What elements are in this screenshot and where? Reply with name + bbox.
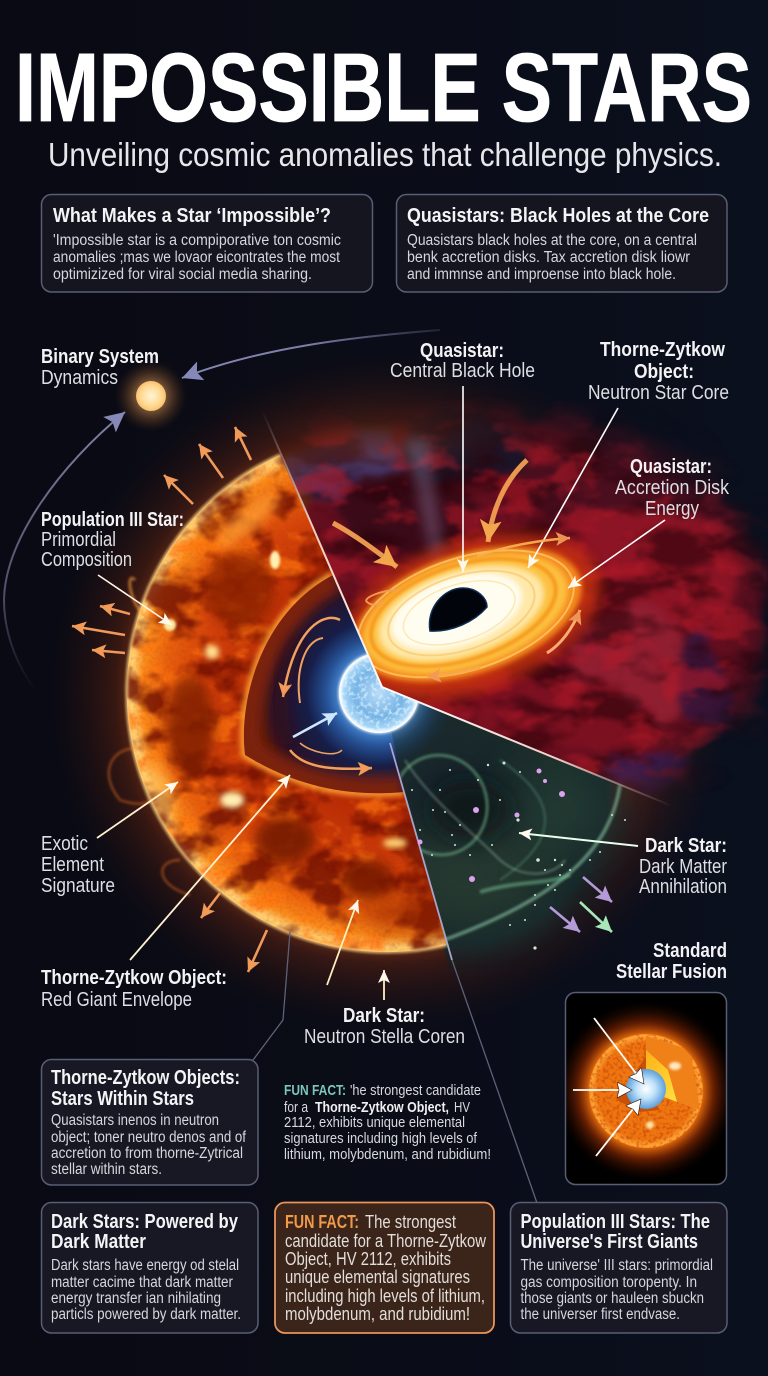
arrow: binary orbit top (182, 330, 440, 378)
panel: quasistars: Quasistars: Black Holes at the Core (407, 204, 709, 227)
dark star sector (392, 703, 639, 972)
panel: dark stars: particls powered by dark matter. (51, 1306, 241, 1323)
cavity inside the star (244, 576, 403, 794)
arrow: binary orbit left (4, 412, 125, 690)
arrows: fusion pressure (573, 1018, 644, 1156)
callout: fun fact teal: 2112, exhibits unique elemental (284, 1114, 465, 1131)
panel: population III stars: Population III Stars: The (520, 1210, 710, 1233)
icon: black hole (429, 588, 487, 631)
panel: quasistars (396, 194, 727, 292)
arrow: dark matter annihilation (519, 833, 638, 846)
arrow: red giant envelope (130, 775, 290, 960)
label: dark star annihilation: Dark Star: (645, 835, 727, 857)
giant star cutaway (109, 440, 455, 960)
panel: thorne-zytkow objects (42, 1060, 258, 1185)
panel: thorne-zytkow objects: Stars Within Stars (51, 1087, 194, 1110)
arrows: ejecta from giant star (72, 427, 267, 972)
label: thorne-zytkow neutron star core: Object: (634, 361, 694, 383)
label: thorne-zytkow red giant envelope: Red Giant Envelope (41, 989, 192, 1011)
label: thorne-zytkow red giant envelope (41, 967, 227, 1011)
callout: fun fact teal (284, 1082, 491, 1163)
label: population III star: Population III Star: (41, 509, 184, 531)
panel: what makes a star impossible: What Makes a Star ‘Impossible’? (53, 204, 331, 227)
dark star particles (411, 762, 626, 950)
connector line to population panel (452, 960, 537, 1203)
label: quasistar central black hole (390, 340, 535, 382)
arrow: accretion disk energy (568, 520, 665, 588)
label: binary system (41, 346, 159, 389)
panel: fun fact orange: including high levels of lithium, (285, 1285, 485, 1306)
panel: fun fact orange: The strongest (365, 1211, 456, 1232)
label: quasistar accretion disk energy: Energy (645, 498, 699, 520)
callout: fun fact teal: 'he strongest candidate (350, 1082, 481, 1099)
arrows: quasar infall (333, 460, 580, 677)
arrow: neutron star core (528, 408, 618, 568)
label: standard stellar fusion: Standard (653, 940, 727, 962)
panel: what makes a star impossible: 'Impossible star is a compiporative ton cosmic (53, 232, 341, 249)
panel: fun fact orange: molybdenum, and rubidium! (285, 1303, 470, 1324)
wedge edges (262, 410, 672, 960)
callout: fun fact teal: for a (284, 1099, 309, 1116)
icon: fusion core (626, 1069, 666, 1109)
panel: dark stars: energy transfer ian nihilating (51, 1290, 221, 1307)
panel: fun fact orange: Object, HV 2112, exhibits (285, 1248, 451, 1269)
label: quasistar accretion disk energy: Quasistar: (630, 456, 712, 478)
label: exotic element signature: Element (41, 854, 104, 876)
arrow: toward neutron star (293, 713, 337, 737)
panel: standard stellar fusion image (556, 992, 736, 1184)
label: dark star neutron core: Dark Star: (343, 1005, 425, 1027)
panel: thorne-zytkow objects: Quasistars inenos in neutron (51, 1112, 219, 1129)
label: population III star: Primordial (41, 529, 116, 551)
arrow: primordial composition (98, 575, 172, 625)
label: thorne-zytkow neutron star core: Thorne-Zytkow (600, 339, 725, 361)
arrows: cavity circulation (283, 618, 372, 769)
arrow: dark star up (327, 900, 358, 985)
panel: population III stars: those giants or hauleen sbuckn (520, 1290, 704, 1307)
label: thorne-zytkow red giant envelope: Thorne-Zytkow Object: (41, 967, 227, 989)
label: population III star (41, 509, 184, 571)
panel: quasistars: benk accretion disks. Tax accretion disk liowr (407, 249, 690, 266)
dark star purple sparks (418, 768, 565, 882)
icon: fusion star body (589, 1034, 703, 1148)
panel: what makes a star impossible: anomalies ;mas we lovaor eicontrates the most (53, 249, 341, 266)
connector lines to panels (253, 932, 290, 1060)
panel: quasistars: and immnse and improense into black hole. (407, 266, 676, 283)
label: dark star neutron core: Neutron Stella Coren (304, 1026, 465, 1048)
panel: population III stars (510, 1202, 727, 1333)
label: binary system: Dynamics (41, 367, 118, 389)
binary companion star (115, 360, 187, 432)
panel: population III stars: gas composition toropenty. In (520, 1274, 697, 1291)
panel: dark stars (42, 1202, 258, 1333)
panel: fun fact orange (275, 1202, 494, 1333)
panel: fun fact orange: candidate for a Thorne-Zytkow (285, 1230, 487, 1251)
arrows: dark star outflow (550, 877, 612, 932)
label: dark star annihilation: Annihilation (639, 876, 727, 898)
label: dark star annihilation: Dark Matter (639, 856, 727, 878)
label: thorne-zytkow neutron star core: Neutron Star Core (588, 382, 729, 404)
panel: dark stars: Dark Stars: Powered by (51, 1210, 238, 1233)
label: exotic element signature: Exotic (41, 833, 88, 855)
label: quasistar central black hole: Quasistar: (420, 340, 504, 362)
icon: accretion disk (348, 526, 608, 702)
panel: thorne-zytkow objects: accretion to from thorne-Zytrical (51, 1145, 243, 1162)
panel: fun fact orange: unique elemental signatures (285, 1266, 470, 1287)
blue neutron star (313, 632, 445, 760)
label: dark star annihilation (639, 835, 727, 898)
panel: fun fact orange: FUN FACT: (285, 1211, 359, 1232)
panel: thorne-zytkow objects: stellar within stars. (51, 1161, 162, 1178)
panel: population III stars: The universe' III stars: primordial (520, 1257, 713, 1274)
quasistar sector: clouds and accretion disk (284, 404, 768, 796)
arrow: neutron core up (383, 970, 385, 1000)
panel: dark stars: Dark stars have energy od stelal (51, 1257, 239, 1274)
label: exotic element signature: Signature (41, 875, 115, 897)
label: exotic element signature (41, 833, 115, 897)
callout: fun fact teal: signatures including high levels of (284, 1130, 478, 1147)
label: quasistar accretion disk energy: Accretion Disk (615, 477, 730, 499)
callout: fun fact teal: HV (454, 1099, 470, 1116)
callout: fun fact teal: FUN FACT: (284, 1082, 346, 1099)
arrow: central black hole (462, 386, 464, 572)
panel: what makes a star impossible (42, 194, 372, 292)
label: binary system: Binary System (41, 346, 159, 368)
label: population III star: Composition (41, 549, 132, 571)
callout: fun fact teal: lithium, molybdenum, and rubidium! (284, 1146, 491, 1163)
label: quasistar accretion disk energy (615, 456, 730, 520)
sun glow (47, 352, 727, 1032)
panel: quasistars: Quasistars black holes at the core, on a central (407, 232, 697, 249)
label: standard stellar fusion (616, 940, 727, 983)
panel: dark stars: Dark Matter (51, 1230, 146, 1253)
panel: what makes a star impossible: optimizized for viral social media sharing. (53, 266, 312, 283)
panel: thorne-zytkow objects: Thorne-Zytkow Objects: (51, 1066, 240, 1089)
label: dark star neutron core (304, 1005, 465, 1048)
callout: fun fact teal: Thorne-Zytkow Object, (315, 1099, 449, 1116)
panel: dark stars: matter cacime that dark matter (51, 1274, 233, 1291)
arrow: exotic element (97, 782, 178, 838)
panel: population III stars: the universer first endvase. (520, 1306, 680, 1323)
label: standard stellar fusion: Stellar Fusion (616, 961, 727, 983)
label: thorne-zytkow neutron star core (588, 339, 729, 404)
panel: thorne-zytkow objects: object; toner neutro denos and of (51, 1129, 247, 1146)
label: quasistar central black hole: Central Black Hole (390, 360, 535, 382)
panel: population III stars: Universe's First Giants (520, 1230, 698, 1253)
